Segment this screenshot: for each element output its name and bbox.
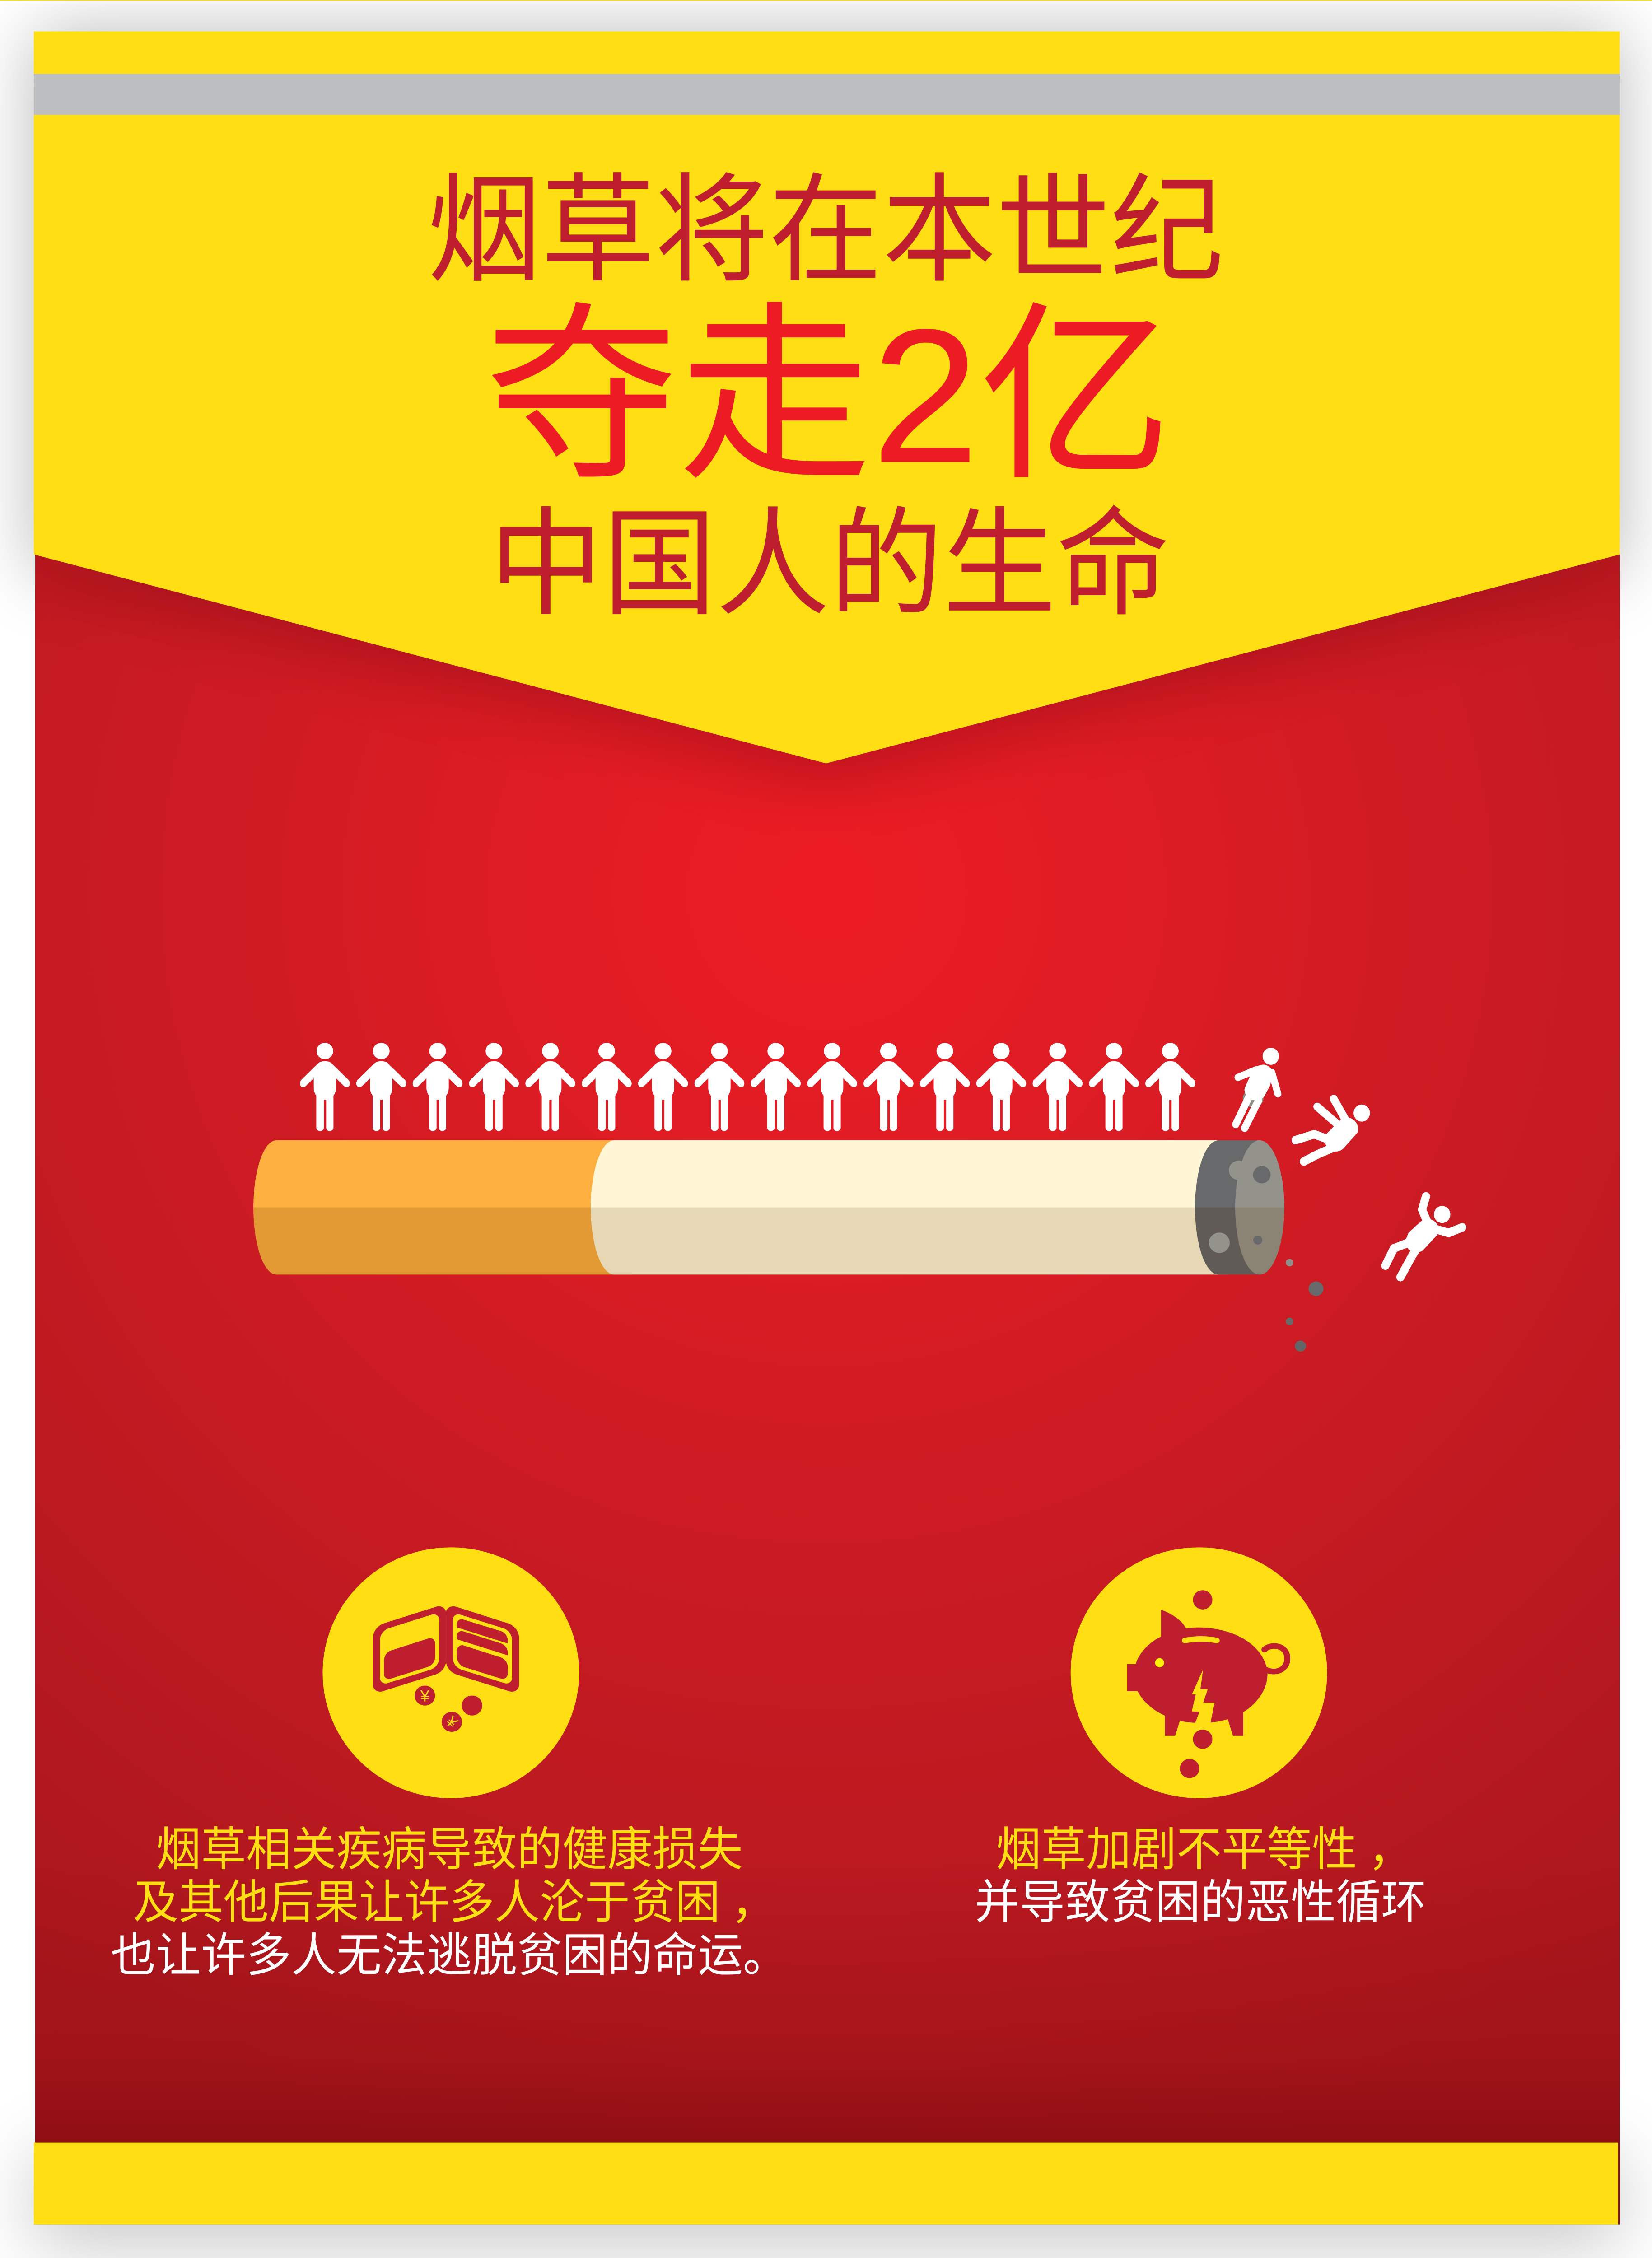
- icon: yen coin 2: ¥: [442, 1712, 462, 1731]
- grey header stripe: [34, 74, 1620, 115]
- falling figure 3: [1385, 1196, 1462, 1277]
- falling figure 2: [1296, 1099, 1370, 1162]
- row of standing people: [300, 1043, 1195, 1131]
- panel: yellow header chevron: [34, 31, 1620, 763]
- title line 1: 烟草将在本世纪: [427, 165, 1224, 297]
- cigarette paper: [591, 1140, 1228, 1274]
- icon: wallet: [373, 1606, 519, 1692]
- text block: left caption: [111, 1824, 788, 1981]
- title line 3: 中国人的生命: [490, 499, 1170, 630]
- falling figure 1: [1236, 1048, 1279, 1128]
- cigarette filter: [253, 1140, 632, 1274]
- text block: right caption: [975, 1824, 1426, 1928]
- falling ash: [1286, 1259, 1323, 1352]
- chevron shadow: [9, 530, 1644, 781]
- drop shadow: bottom band: [34, 2151, 1620, 2249]
- icon: broken piggy bank: [1127, 1590, 1287, 1778]
- panel: red background: [35, 530, 1620, 2143]
- icon: yen coin 1: [415, 1686, 435, 1706]
- icon circle: piggy bank: [1071, 1547, 1327, 1798]
- page top edge line: [0, 0, 1652, 1]
- text block: left caption: 及其他后果让许多人沦于贫困，: [133, 1876, 776, 1928]
- icon: yen coin 1: ¥: [420, 1687, 429, 1705]
- text block: right caption: 烟草加剧不平等性，: [996, 1824, 1413, 1875]
- bottom yellow band: [34, 2143, 1620, 2225]
- falling people: [1236, 1048, 1462, 1277]
- title: [427, 165, 1224, 630]
- icon: plain coin: [462, 1695, 482, 1716]
- cigarette: [253, 1140, 1323, 1352]
- ash end: [1195, 1140, 1284, 1274]
- text block: right caption: 并导致贫困的恶性循环: [975, 1876, 1426, 1928]
- text block: left caption: 烟草相关疾病导致的健康损失: [156, 1824, 743, 1875]
- icon circle: wallet: [322, 1547, 579, 1798]
- text block: left caption: 也让许多人无法逃脱贫困的命运。: [111, 1930, 788, 1981]
- drop shadow: upper panel: [34, 31, 1620, 575]
- title line 2: 夺走2亿: [485, 290, 1172, 503]
